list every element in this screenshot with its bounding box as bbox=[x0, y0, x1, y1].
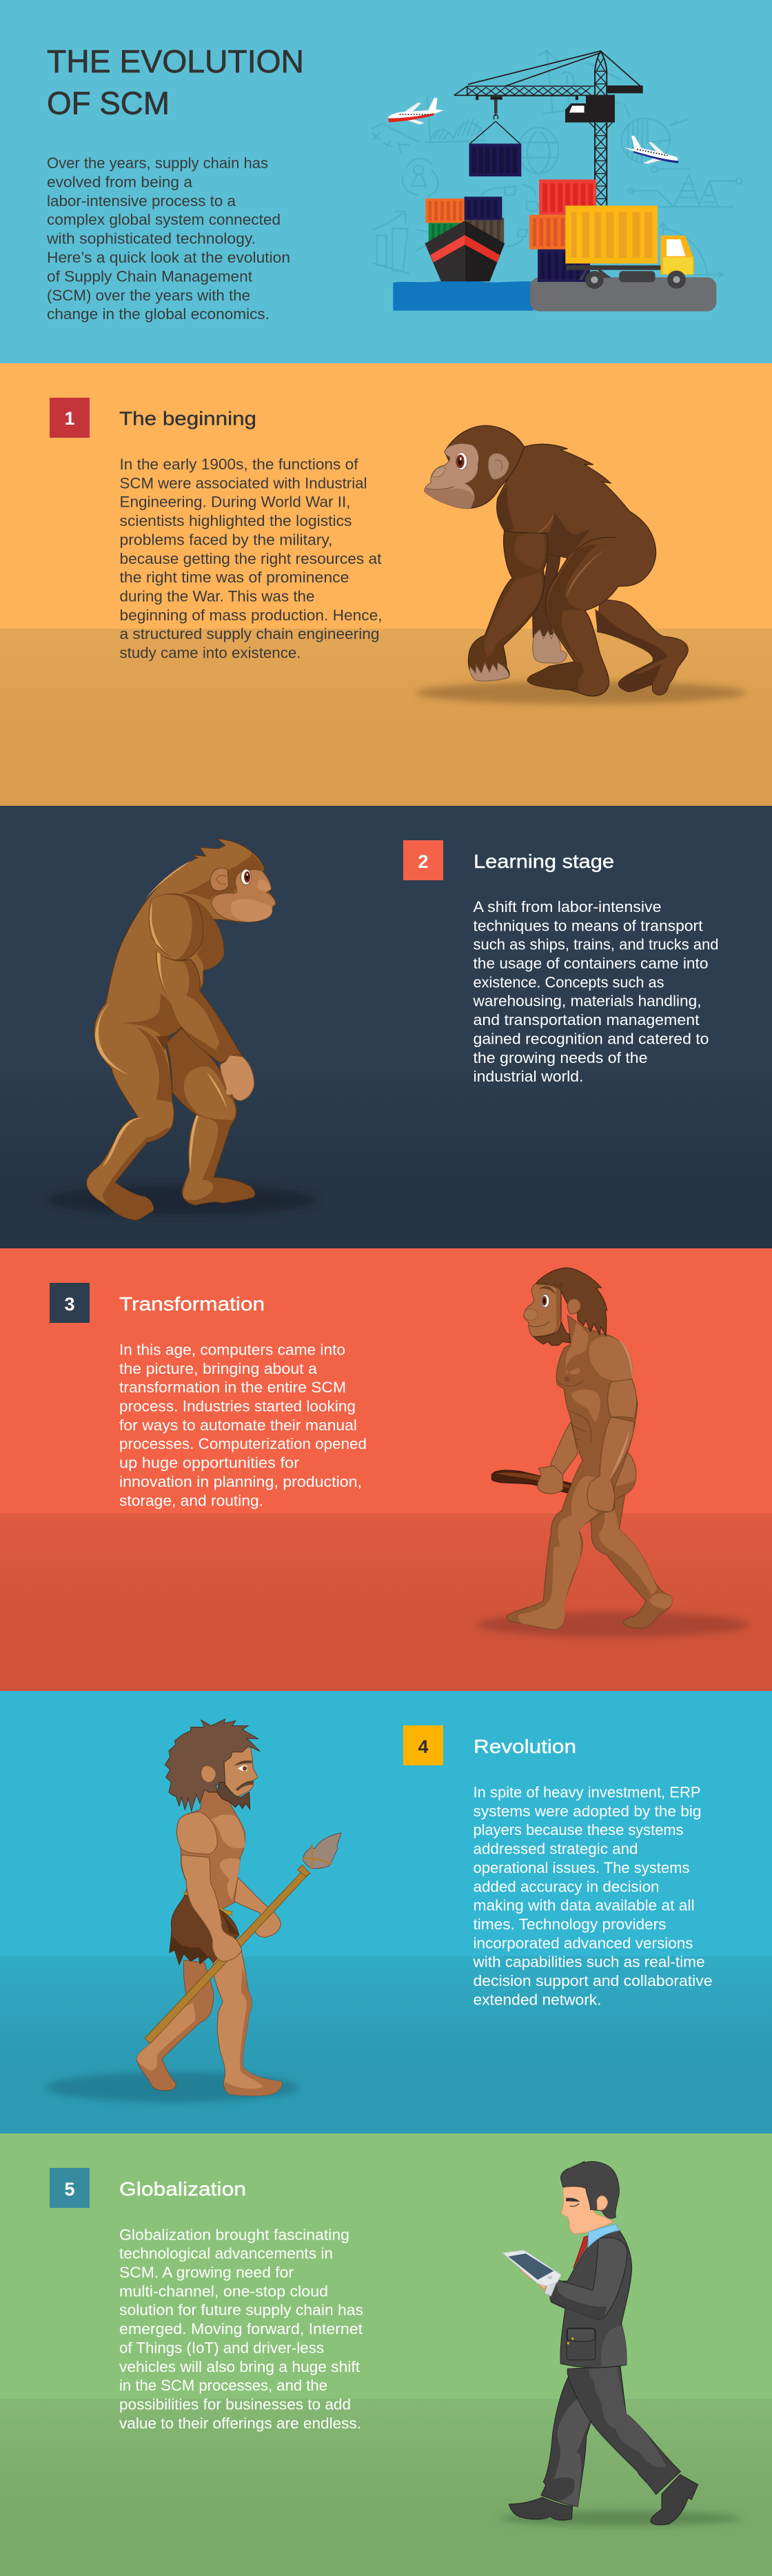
body text: beginning of mass production. Hence, bbox=[120, 607, 382, 624]
body text: technological advancements in bbox=[119, 2245, 333, 2262]
intro text: Over the years, supply chain has bbox=[47, 154, 268, 172]
body text: making with data available at all bbox=[473, 1897, 695, 1914]
title: THE EVOLUTION bbox=[47, 43, 304, 79]
body text: the growing needs of the bbox=[473, 1049, 648, 1066]
body text: addressed strategic and bbox=[473, 1840, 638, 1858]
figure: upright ape bbox=[46, 839, 318, 1220]
body text: gained recognition and catered to bbox=[473, 1030, 709, 1047]
body text: study came into existence. bbox=[120, 644, 301, 662]
water bbox=[393, 281, 534, 311]
heading: Learning stage bbox=[474, 851, 614, 872]
body text: solution for future supply chain has bbox=[119, 2302, 363, 2319]
body text: possibilities for businesses to add bbox=[119, 2396, 351, 2413]
heading: Globalization bbox=[119, 2178, 246, 2200]
figure: businessman with tablet bbox=[500, 2161, 741, 2526]
body text: up huge opportunities for bbox=[119, 1454, 299, 1472]
body text: operational issues. The systems bbox=[473, 1859, 689, 1876]
heading: Transformation bbox=[119, 1293, 265, 1315]
body text: extended network. bbox=[473, 1991, 601, 2008]
intro text: change in the global economics. bbox=[47, 305, 270, 323]
badge 5 bbox=[50, 2168, 90, 2208]
ship bbox=[425, 221, 505, 281]
badge 2 bbox=[403, 840, 443, 880]
body text: Globalization brought fascinating bbox=[119, 2226, 349, 2243]
body text: the picture, bringing about a bbox=[119, 1360, 318, 1377]
body text: with capabilities such as real-time bbox=[472, 1954, 704, 1971]
figure: caveman with club bbox=[477, 1268, 749, 1637]
body text: for ways to automate their manual bbox=[119, 1417, 357, 1434]
body text: A shift from labor-intensive bbox=[473, 898, 662, 915]
intro text: evolved from being a bbox=[47, 173, 193, 190]
body text: techniques to means of transport bbox=[473, 917, 703, 934]
truck bbox=[565, 205, 694, 289]
body text bbox=[472, 1784, 713, 2008]
body text: In spite of heavy investment, ERP bbox=[473, 1784, 700, 1801]
illustration: crane, ship, truck bbox=[372, 50, 742, 312]
body text: transformation in the entire SCM bbox=[119, 1379, 346, 1396]
body text: existence. Concepts such as bbox=[473, 973, 664, 991]
heading: Revolution bbox=[474, 1736, 576, 1757]
title bbox=[47, 43, 304, 121]
intro text bbox=[46, 154, 290, 323]
badge 4: 4 bbox=[418, 1736, 429, 1757]
figure: ape bbox=[416, 425, 746, 704]
body text: players because these systems bbox=[473, 1821, 684, 1838]
body text: the right time was of prominence bbox=[120, 569, 349, 586]
body text: innovation in planning, production, bbox=[119, 1473, 362, 1490]
body text: decision support and collaborative bbox=[473, 1972, 713, 1989]
body text: vehicles will also bring a huge shift bbox=[119, 2358, 360, 2375]
body text: process. Industries started looking bbox=[119, 1398, 356, 1414]
body text: systems were adopted by the big bbox=[473, 1803, 702, 1820]
body text: In this age, computers came into bbox=[119, 1341, 345, 1358]
intro text: complex global system connected bbox=[47, 211, 281, 228]
dock bbox=[530, 277, 716, 312]
body text: during the War. This was the bbox=[120, 587, 314, 605]
panel: step 4 revolution bbox=[0, 1691, 772, 2133]
badge 5: 5 bbox=[64, 2179, 75, 2200]
crane bbox=[454, 51, 640, 205]
faint sketches bbox=[372, 50, 742, 277]
badge 1 bbox=[50, 398, 90, 438]
title: OF SCM bbox=[47, 85, 170, 121]
body text: problems faced by the military, bbox=[120, 531, 332, 548]
body text: in the SCM processes, and the bbox=[119, 2377, 327, 2394]
plane: red stripe bbox=[388, 98, 444, 125]
body text: scientists highlighted the logistics bbox=[120, 512, 352, 529]
body text: SCM were associated with Industrial bbox=[120, 474, 367, 491]
body text: industrial world. bbox=[473, 1068, 583, 1085]
body text: Engineering. During World War II, bbox=[120, 494, 350, 511]
body text: In the early 1900s, the functions of bbox=[120, 456, 358, 473]
figure: caveman with spear bbox=[46, 1719, 341, 2102]
body text: incorporated advanced versions bbox=[473, 1934, 693, 1951]
panel: step 5 globalization bbox=[0, 2133, 772, 2576]
hanging container bbox=[469, 143, 521, 176]
body text: the usage of containers came into bbox=[473, 955, 709, 972]
badge 3 bbox=[50, 1283, 90, 1323]
panel: step 2 learning stage bbox=[0, 806, 772, 1248]
intro text: of Supply Chain Management bbox=[47, 267, 252, 285]
plane: blue stripe bbox=[624, 136, 678, 164]
badge 2: 2 bbox=[418, 851, 429, 872]
body text: warehousing, materials handling, bbox=[472, 993, 702, 1010]
body text bbox=[120, 456, 382, 662]
left stack containers bbox=[425, 196, 504, 244]
badge 3: 3 bbox=[64, 1294, 75, 1315]
intro text: (SCM) over the years with the bbox=[47, 287, 250, 304]
heading: The beginning bbox=[119, 408, 256, 429]
intro text: with sophisticated technology. bbox=[46, 230, 256, 247]
body text: such as ships, trains, and trucks and bbox=[473, 936, 718, 953]
body text bbox=[472, 898, 718, 1085]
badge 4 bbox=[403, 1725, 443, 1765]
body text: storage, and routing. bbox=[119, 1492, 263, 1509]
body text: SCM. A growing need for bbox=[119, 2264, 294, 2281]
right stack containers bbox=[529, 179, 596, 282]
intro text: Here’s a quick look at the evolution bbox=[47, 249, 290, 266]
panel: step 3 transformation bbox=[0, 1248, 772, 1691]
intro text: labor-intensive process to a bbox=[47, 192, 236, 210]
body text: a structured supply chain engineering bbox=[120, 625, 379, 642]
panel: step 1 the beginning bbox=[0, 363, 772, 806]
body text: multi-channel, one-stop cloud bbox=[119, 2282, 328, 2300]
body text bbox=[119, 2226, 363, 2432]
body text: and transportation management bbox=[473, 1011, 699, 1028]
body text: of Things (IoT) and driver-less bbox=[119, 2339, 324, 2356]
body text: emerged. Moving forward, Internet bbox=[119, 2320, 363, 2337]
body text: added accuracy in decision bbox=[473, 1878, 659, 1895]
panel: header bbox=[0, 0, 772, 363]
badge 1: 1 bbox=[64, 408, 75, 429]
body text bbox=[119, 1341, 367, 1509]
body text: value to their offerings are endless. bbox=[119, 2415, 361, 2432]
body text: times. Technology providers bbox=[473, 1916, 666, 1933]
body text: processes. Computerization opened bbox=[119, 1435, 367, 1452]
body text: because getting the right resources at bbox=[120, 550, 382, 567]
